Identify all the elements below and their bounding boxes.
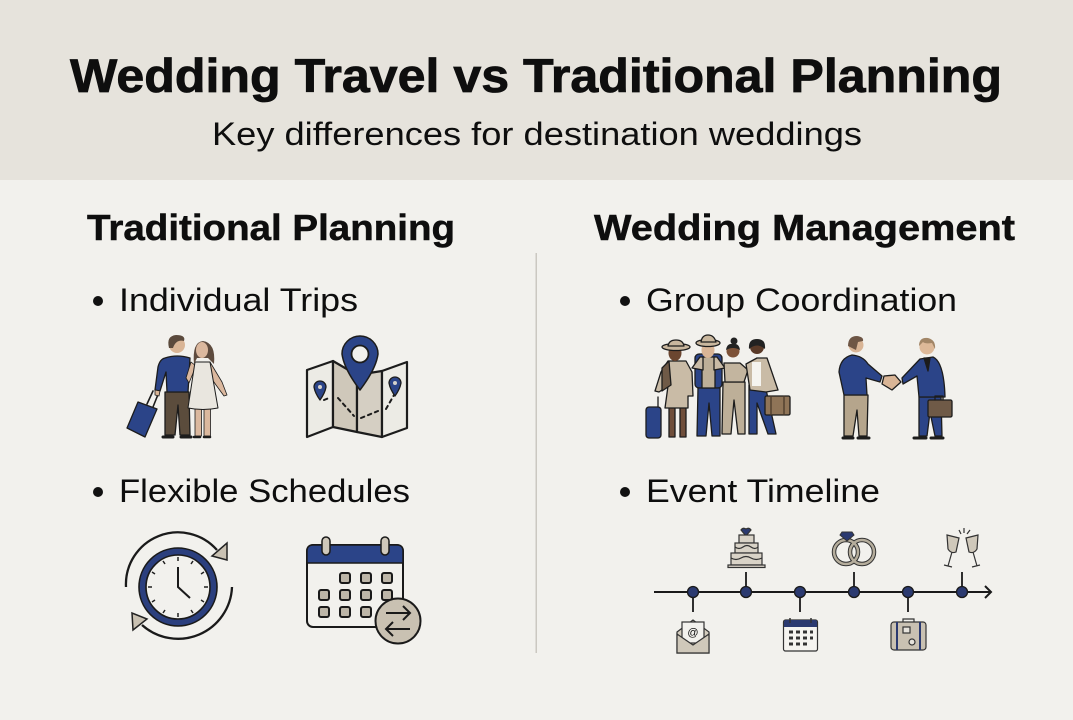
icon: folded map with pins (307, 336, 407, 437)
icon: invitation envelope: @ (687, 627, 699, 639)
chart: event timeline (654, 528, 991, 653)
icon: calendar (784, 618, 818, 651)
icon: invitation envelope (677, 620, 709, 653)
icon: calendar with swap arrows (307, 537, 420, 644)
bullet: group coordination: Group Coordination (646, 282, 957, 318)
heading: traditional planning: Traditional Planning (87, 207, 455, 248)
bullet: flexible schedules: Flexible Schedules (119, 473, 410, 509)
panel: wedding management (594, 207, 1015, 653)
icon: champagne toast (944, 528, 980, 567)
heading: wedding management: Wedding Management (594, 207, 1015, 248)
icon: wedding rings (834, 532, 874, 564)
icon: suitcase (891, 619, 926, 650)
icon: business handshake (839, 336, 952, 438)
icon: wedding cake (728, 528, 765, 568)
title: Wedding Travel vs Traditional Planning (70, 49, 1002, 102)
header band (0, 0, 1073, 180)
bullet: individual trips: Individual Trips (119, 282, 358, 318)
icon: couple with suitcase (127, 335, 227, 437)
icon: travel group (646, 335, 790, 438)
panel: traditional planning (87, 207, 455, 644)
icon: clock with rotating arrows (126, 532, 232, 639)
bullet: event timeline: Event Timeline (646, 473, 880, 509)
subtitle: Key differences for destination weddings (212, 116, 862, 152)
